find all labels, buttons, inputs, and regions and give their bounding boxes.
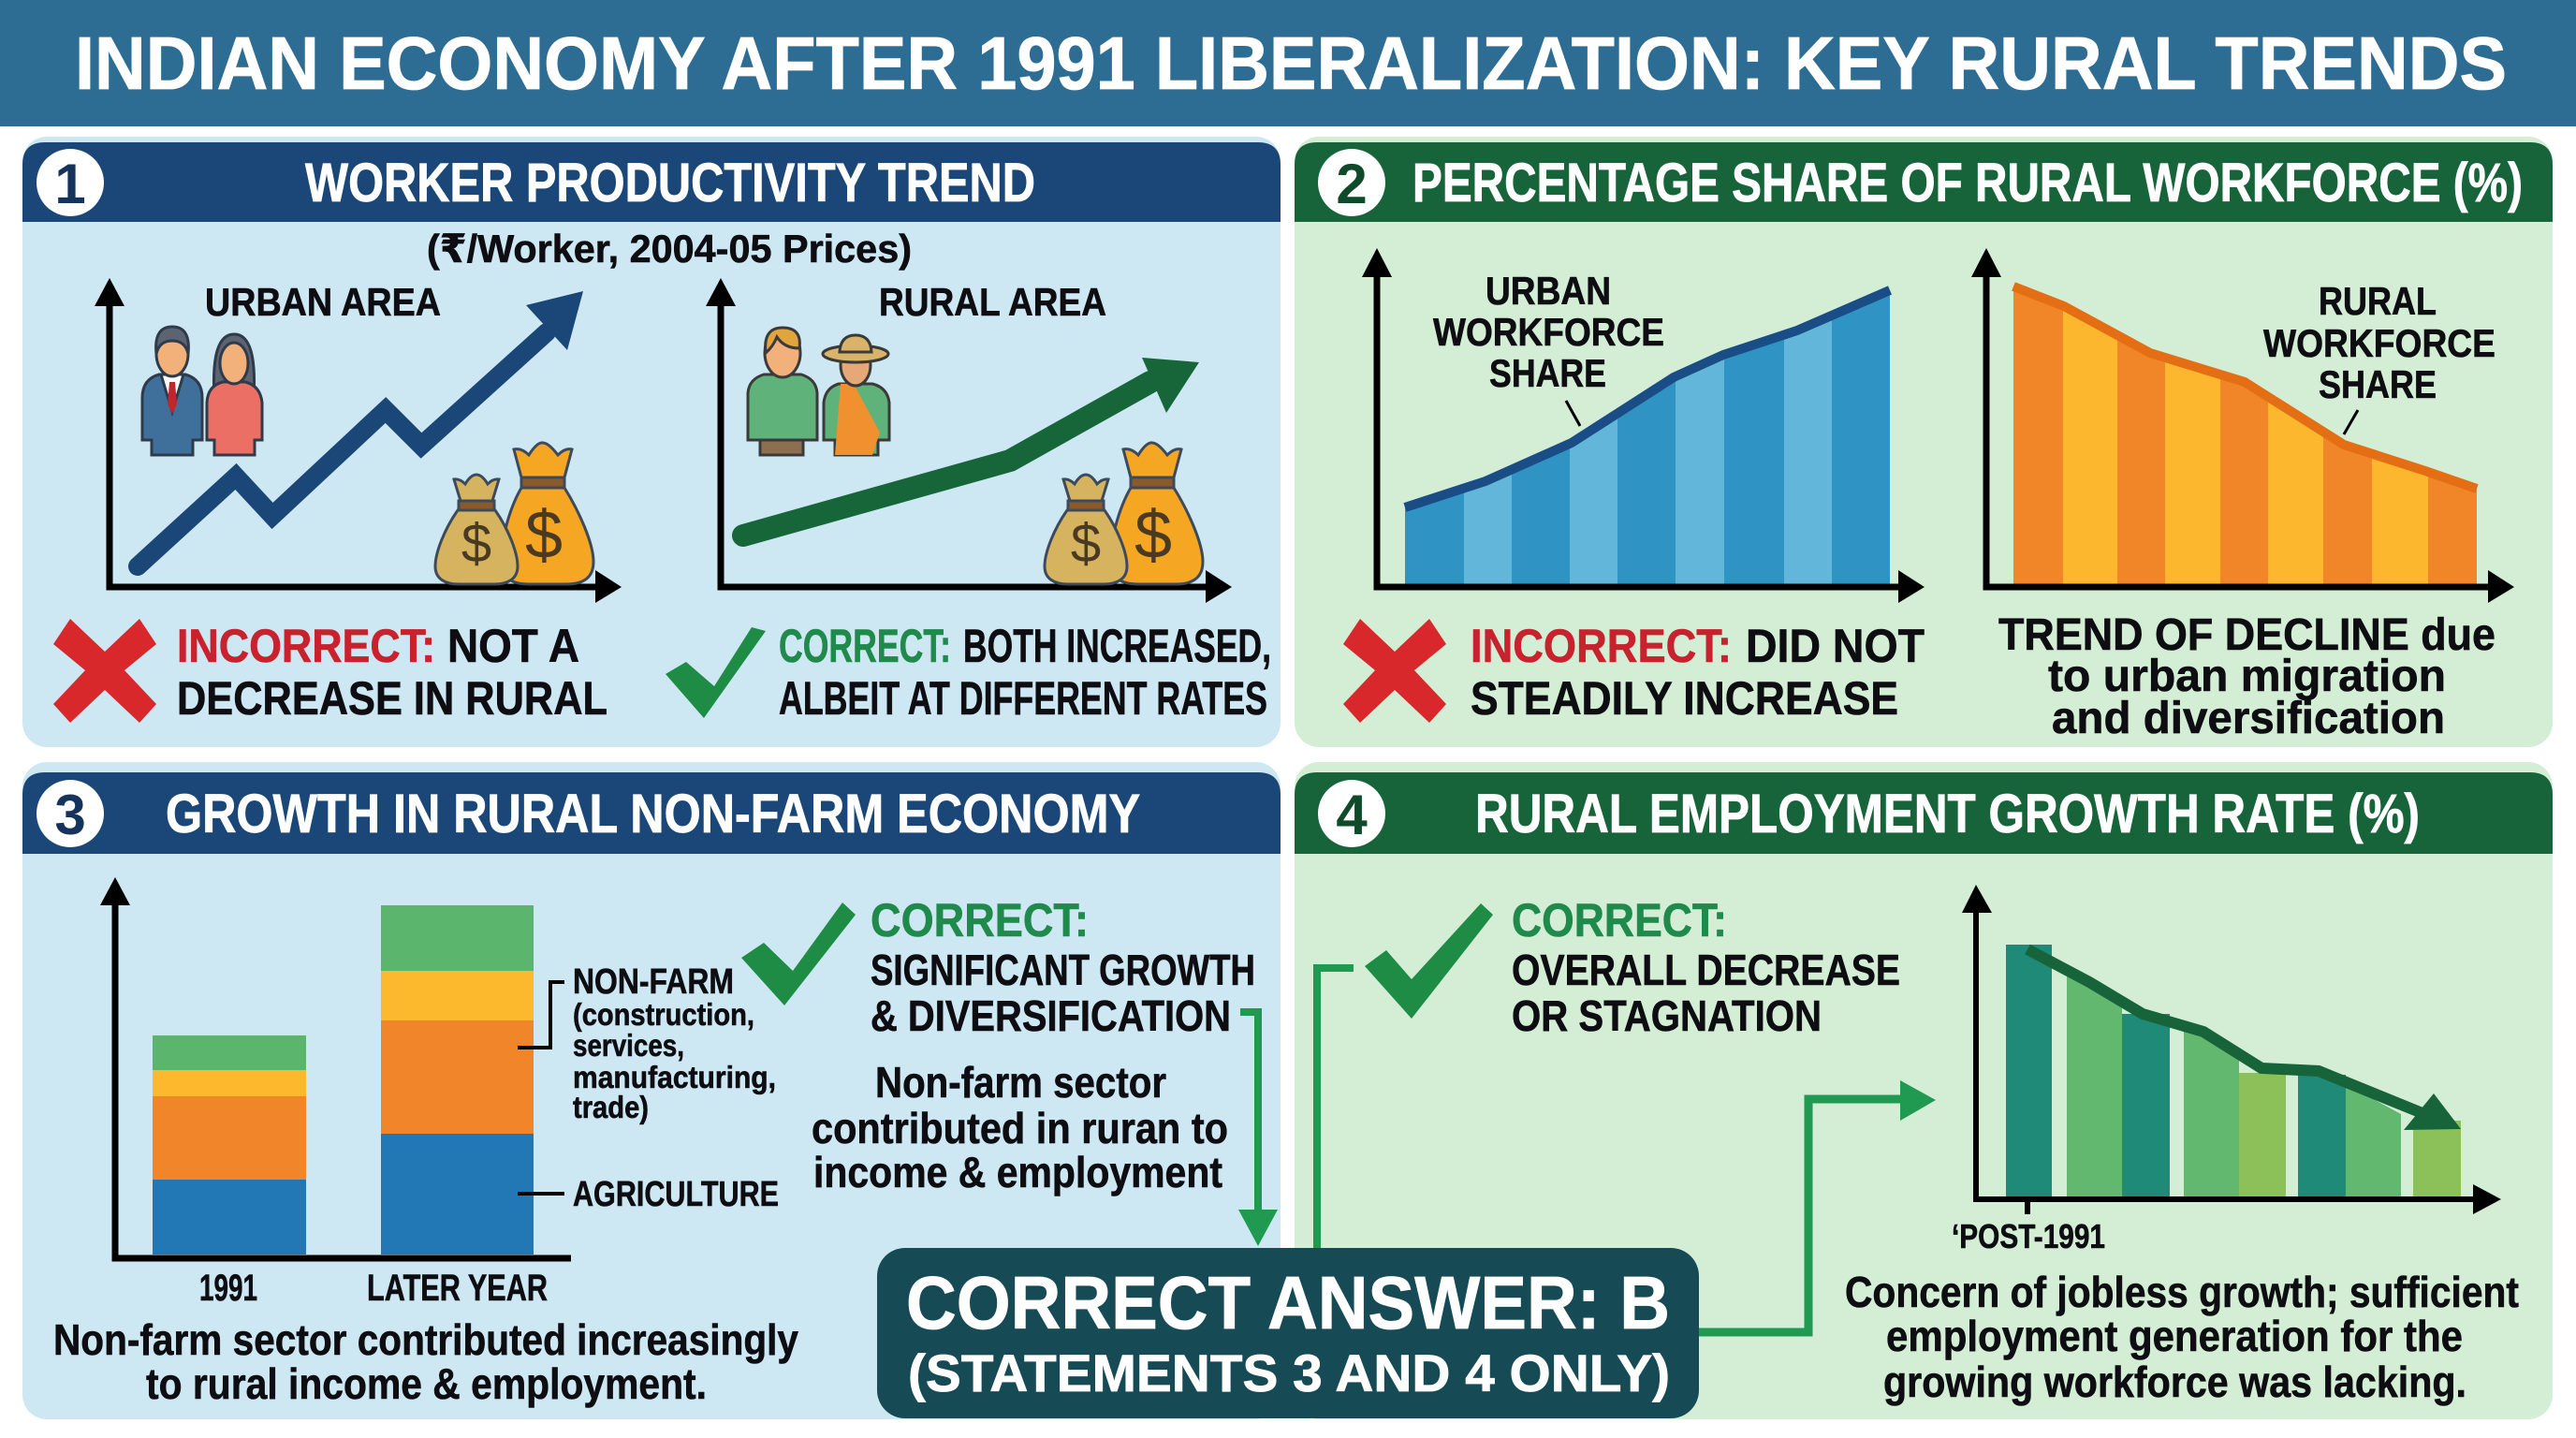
trend of decline note: to urban migration bbox=[2048, 652, 2446, 701]
panel 4 header: RURAL EMPLOYMENT GROWTH RATE (%) bbox=[1475, 784, 2420, 844]
icon: green check bbox=[1365, 903, 1493, 1019]
jobless growth note: growing workforce was lacking. bbox=[1883, 1357, 2466, 1406]
area chart: rural workforce share bbox=[1971, 248, 2514, 603]
stacked bar chart bbox=[100, 877, 779, 1309]
correct answer box: (STATEMENTS 3 AND 4 ONLY) bbox=[908, 1343, 1670, 1402]
explanatory note: contributed in ruran to bbox=[812, 1104, 1228, 1152]
connector: answer to panel 4 check bbox=[1317, 968, 1354, 1250]
icon: urban money bags: $ bbox=[525, 498, 563, 573]
icon: rural money bags bbox=[1045, 443, 1203, 584]
legend: non-farm: manufacturing, bbox=[573, 1060, 776, 1094]
trend of decline note: and diversification bbox=[2052, 694, 2445, 743]
area chart: urban workforce share bbox=[1362, 248, 1925, 603]
legend: non-farm: trade) bbox=[573, 1090, 649, 1124]
correct answer box: CORRECT ANSWER: B bbox=[906, 1261, 1670, 1344]
verdict: significant growth: CORRECT: bbox=[871, 894, 1089, 946]
bar chart: employment growth: ‘POST-1991 bbox=[1952, 1217, 2105, 1255]
arrow: panel 3 to answer bbox=[1238, 1012, 1278, 1246]
icon: red cross bbox=[1343, 619, 1446, 723]
panel 1: worker productivity trend bbox=[22, 137, 1281, 747]
bottom caption bbox=[53, 1315, 798, 1408]
trend of decline note: TREND OF DECLINE due bbox=[1998, 610, 2496, 660]
area chart: urban workforce share: WORKFORCE bbox=[1433, 310, 1664, 354]
rural area chart bbox=[706, 278, 1232, 603]
area chart: rural workforce share: SHARE bbox=[2319, 362, 2437, 406]
rural area chart: RURAL AREA bbox=[879, 280, 1106, 324]
verdict: correct, both increased: ALBEIT AT DIFFERENT RATES bbox=[779, 672, 1267, 725]
legend: non-farm bbox=[573, 962, 776, 1124]
title banner bbox=[0, 0, 2576, 126]
legend: non-farm: (construction, bbox=[573, 997, 754, 1032]
panel 4 header: 4 bbox=[1336, 784, 1368, 846]
verdict: incorrect, not a decrease: NOT A bbox=[447, 620, 579, 672]
title banner: INDIAN ECONOMY AFTER 1991 LIBERALIZATION: KEY RURAL TRENDS bbox=[75, 22, 2507, 105]
area chart: rural workforce share: WORKFORCE bbox=[2263, 321, 2496, 365]
icon: green check bbox=[666, 627, 766, 718]
panel 2: rural workforce share bbox=[1295, 137, 2553, 747]
stacked bar chart: LATER YEAR bbox=[367, 1268, 548, 1309]
panel 1 header: 1 bbox=[54, 153, 86, 215]
bottom caption: to rural income & employment. bbox=[146, 1359, 707, 1408]
verdict: correct, both increased: BOTH INCREASED, bbox=[963, 620, 1271, 672]
area chart: rural workforce share: RURAL bbox=[2319, 279, 2437, 323]
explanatory note bbox=[812, 1058, 1228, 1196]
bar chart: employment growth bbox=[1952, 885, 2501, 1255]
verdict: incorrect, did not steadily increase: STEADILY INCREASE bbox=[1471, 672, 1898, 725]
legend: agriculture: AGRICULTURE bbox=[573, 1175, 779, 1214]
panel 2 header: 2 bbox=[1336, 153, 1368, 215]
panel 1 header: WORKER PRODUCTIVITY TREND bbox=[305, 153, 1035, 213]
panel 4: rural employment growth rate bbox=[1295, 762, 2553, 1419]
verdict: incorrect, did not steadily increase bbox=[1471, 620, 1925, 725]
bottom caption: Non-farm sector contributed increasingly bbox=[53, 1315, 798, 1364]
icon: urban money bags bbox=[435, 443, 593, 584]
verdict: incorrect, did not steadily increase: INCORRECT: bbox=[1471, 620, 1732, 672]
panel 3 header bbox=[22, 772, 1281, 854]
verdict: correct, both increased bbox=[779, 620, 1271, 725]
jobless growth note: employment generation for the bbox=[1886, 1312, 2463, 1360]
panel 2 header bbox=[1295, 142, 2553, 222]
verdict: incorrect, did not steadily increase: DID NOT bbox=[1746, 620, 1925, 672]
icon: green check bbox=[741, 902, 856, 1005]
explanatory note: Non-farm sector bbox=[875, 1058, 1166, 1107]
panel 3 header: GROWTH IN RURAL NON-FARM ECONOMY bbox=[166, 784, 1140, 844]
icon: red cross bbox=[53, 619, 156, 723]
legend: non-farm: NON-FARM bbox=[573, 962, 734, 1002]
panel 3 header: 3 bbox=[54, 784, 86, 846]
verdict: overall decrease: OR STAGNATION bbox=[1512, 991, 1822, 1040]
area chart: urban workforce share: SHARE bbox=[1489, 351, 1606, 395]
icon: urban money bags: $ bbox=[461, 513, 491, 574]
jobless growth note bbox=[1845, 1268, 2519, 1406]
verdict: significant growth: SIGNIFICANT GROWTH bbox=[871, 946, 1255, 994]
verdict: significant growth: & DIVERSIFICATION bbox=[871, 991, 1231, 1040]
legend: non-farm: services, bbox=[573, 1028, 684, 1063]
panel 1 header bbox=[22, 142, 1281, 222]
urban area chart: URBAN AREA bbox=[205, 280, 441, 324]
verdict: correct, both increased: CORRECT: bbox=[779, 620, 951, 672]
correct answer box bbox=[877, 1248, 1699, 1418]
panel 3: rural non-farm economy bbox=[22, 762, 1281, 1419]
panel 4 header bbox=[1295, 772, 2553, 854]
arrow: answer to panel 4 chart bbox=[1699, 1080, 1936, 1332]
verdict: incorrect, not a decrease: INCORRECT: bbox=[177, 620, 435, 672]
urban area chart bbox=[95, 278, 622, 603]
trend of decline note bbox=[1998, 610, 2496, 743]
verdict: overall decrease: CORRECT: bbox=[1512, 894, 1727, 946]
verdict: incorrect, not a decrease bbox=[177, 620, 607, 725]
stacked bar chart: 1991 bbox=[199, 1268, 257, 1309]
explanatory note: income & employment bbox=[813, 1148, 1222, 1196]
icon: rural workers bbox=[748, 328, 889, 455]
verdict: incorrect, not a decrease: DECREASE IN RURAL bbox=[177, 672, 607, 725]
chart subtitle: (₹/Worker, 2004-05 Prices) bbox=[427, 227, 912, 271]
verdict: significant growth bbox=[871, 894, 1255, 1040]
icon: rural money bags: $ bbox=[1071, 513, 1101, 574]
icon: urban workers bbox=[142, 327, 262, 455]
icon: rural money bags: $ bbox=[1134, 498, 1172, 573]
verdict: overall decrease: OVERALL DECREASE bbox=[1512, 946, 1900, 994]
verdict: overall decrease bbox=[1512, 894, 1900, 1040]
area chart: urban workforce share: URBAN bbox=[1486, 269, 1611, 313]
